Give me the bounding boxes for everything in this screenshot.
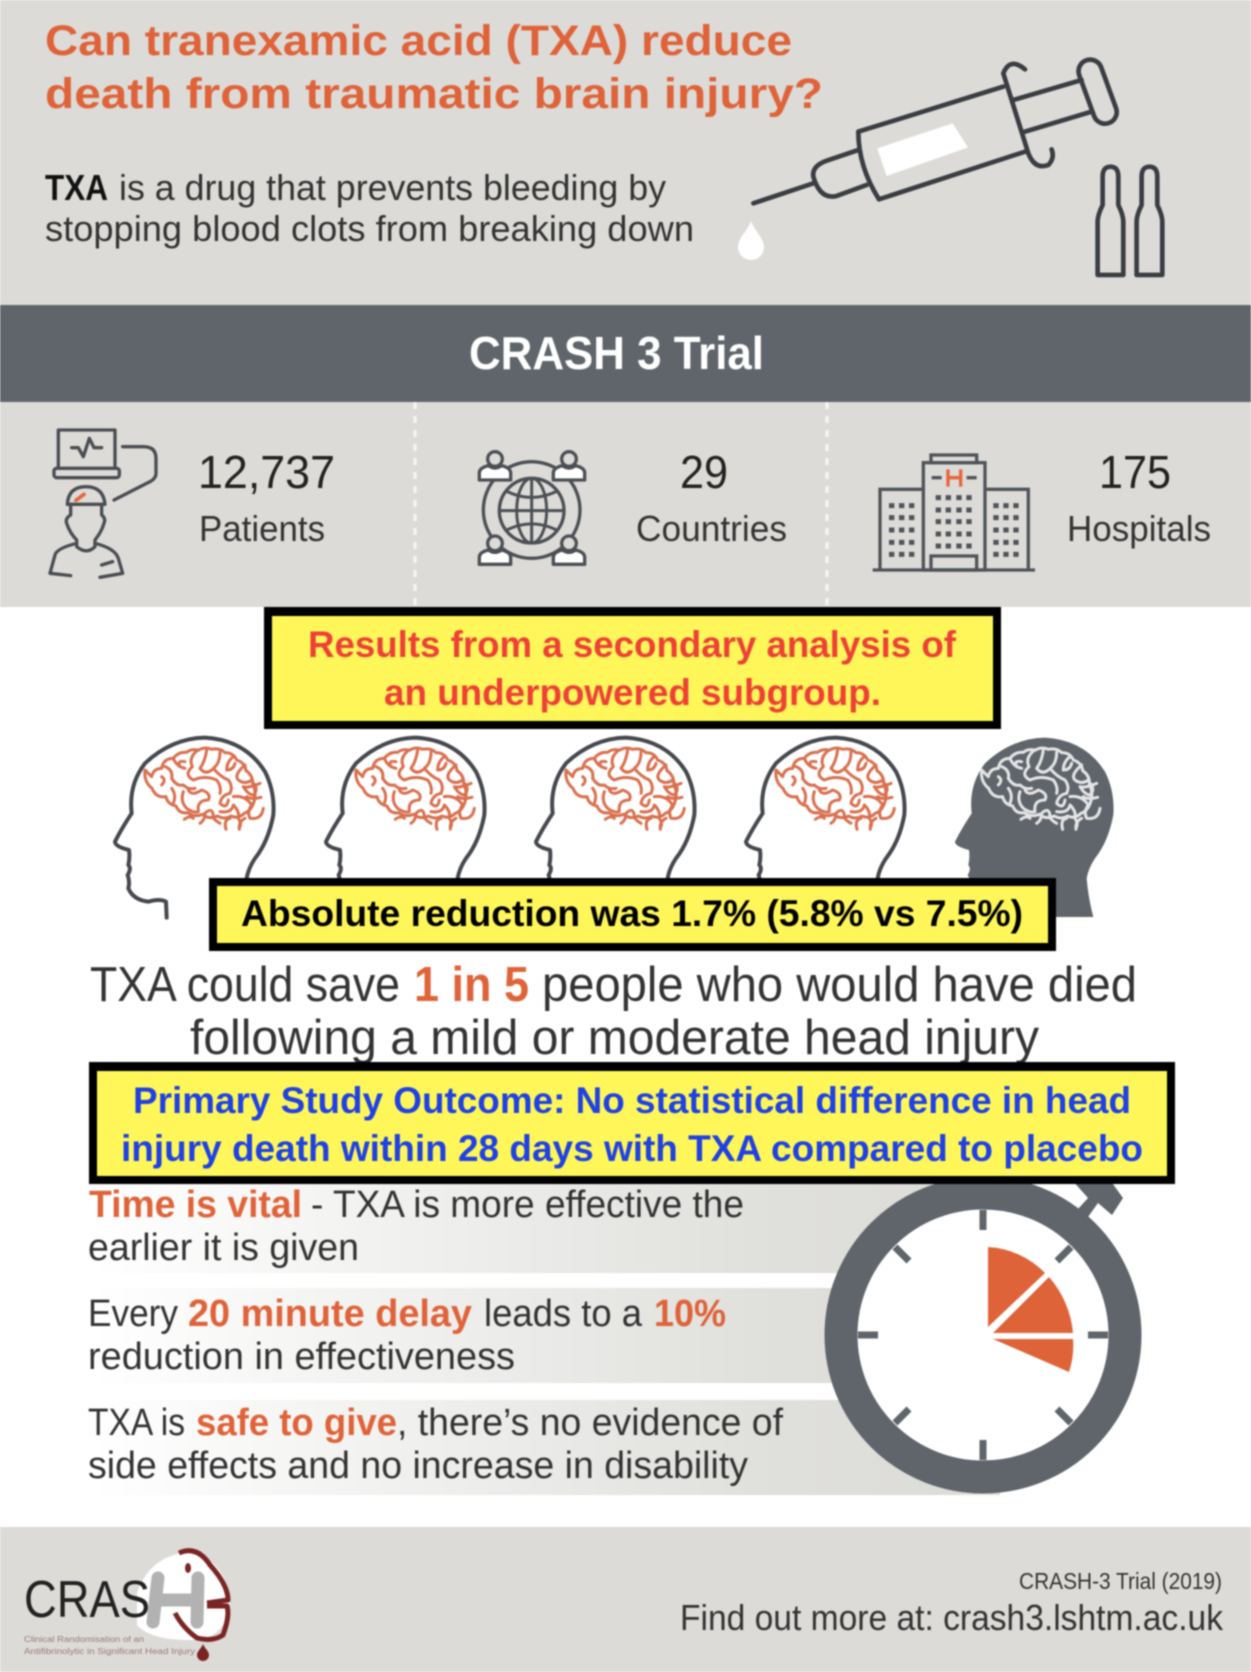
text block: safe to give: TXA is	[88, 1402, 185, 1444]
text block: 20 minute delay: 20 minute delay	[188, 1293, 472, 1335]
logo: CRASH: Antifibrinolytic in Significant Head Injury	[24, 1647, 195, 1656]
text block: safe to give: side effects and no increase in disability	[88, 1445, 748, 1487]
banner: CRASH 3 Trial	[0, 305, 1251, 402]
stat: countries: 29	[680, 446, 728, 498]
text block: 1 in 5 statement	[90, 958, 1137, 1065]
text block: TXA definition	[45, 167, 694, 249]
callout: primary study outcome	[89, 1062, 1175, 1184]
text block: safe to give	[88, 1402, 783, 1487]
text block: time is vital	[88, 1184, 744, 1269]
stat: hospitals	[1067, 446, 1211, 549]
icon: hospital	[873, 455, 1035, 570]
text block: time is vital: earlier it is given	[88, 1227, 359, 1269]
text block: time is vital: - TXA is more effective the	[311, 1184, 744, 1226]
title	[45, 17, 823, 118]
title: death from traumatic brain injury?	[45, 70, 823, 118]
text block: TXA definition: is a drug that prevents bleeding by	[119, 167, 666, 208]
title: Can tranexamic acid (TXA) reduce	[45, 17, 792, 65]
callout: absolute reduction	[209, 878, 1056, 951]
text block: citation and link: Find out more at: crash3.lshtm.ac.uk	[680, 1597, 1224, 1638]
callout: primary study outcome: Primary Study Outcome: No statistical difference in head	[133, 1080, 1131, 1121]
banner: CRASH 3 Trial: CRASH 3 Trial	[469, 327, 764, 379]
text block: time is vital: Time is vital	[89, 1184, 302, 1226]
icon: vials	[1098, 167, 1162, 275]
callout: secondary analysis: an underpowered subgroup.	[384, 672, 881, 713]
logo: CRASH	[24, 1551, 230, 1661]
stat: patients: 12,737	[198, 446, 335, 498]
panel: header	[0, 0, 1251, 305]
text block: safe to give: , there’s no evidence of	[397, 1402, 783, 1444]
icon: globe with people	[479, 452, 585, 564]
stat: countries: Countries	[636, 508, 787, 549]
text block: 20 minute delay: Every	[88, 1293, 178, 1335]
stat: patients	[198, 446, 335, 549]
stat: countries	[636, 446, 787, 549]
text block: TXA definition: TXA	[45, 167, 108, 208]
icon: patient with monitor	[50, 430, 156, 577]
icon: head 1 with orange brain	[115, 738, 274, 918]
text block: citation and link: CRASH-3 Trial (2019)	[1019, 1568, 1222, 1594]
text block: citation and link	[680, 1568, 1224, 1638]
panel: key messages gradient rows	[85, 1184, 1000, 1495]
callout: secondary analysis	[264, 607, 1001, 729]
panel: trial statistics	[0, 402, 1251, 607]
text block: safe to give: safe to give	[196, 1402, 397, 1444]
stat: patients: Patients	[199, 508, 325, 549]
logo: CRASH: Clinical Randomisation of an	[24, 1635, 144, 1644]
text block: 20 minute delay: 10%	[654, 1293, 726, 1335]
icon: stopwatch	[841, 1180, 1125, 1477]
text block: TXA definition: stopping blood clots from breaking down	[45, 208, 694, 249]
icon: head 2 with orange brain	[326, 738, 485, 918]
text block: 1 in 5 statement: TXA could save	[90, 958, 400, 1012]
text block: 20 minute delay: leads to a	[484, 1293, 643, 1335]
text block: 1 in 5 statement: people who would have died	[542, 958, 1137, 1012]
icon: head 3 with orange brain	[536, 738, 695, 918]
callout: secondary analysis: Results from a secondary analysis of	[308, 624, 957, 665]
text block: 20 minute delay	[88, 1293, 726, 1378]
stat: hospitals: 175	[1099, 446, 1171, 498]
callout: absolute reduction: Absolute reduction was 1.7% (5.8% vs 7.5%)	[241, 893, 1023, 934]
icon: syringe	[753, 56, 1120, 203]
text block: 1 in 5 statement: following a mild or moderate head injury	[190, 1011, 1039, 1065]
text block: 20 minute delay: reduction in effectiveness	[88, 1336, 515, 1378]
icon: head 4 with orange brain	[746, 738, 905, 918]
logo: CRASH: CRAS	[24, 1571, 150, 1629]
text block: 1 in 5 statement: 1 in 5	[414, 958, 529, 1012]
panel: footer	[0, 1527, 1251, 1672]
callout: primary study outcome: injury death within 28 days with TXA compared to placebo	[121, 1128, 1143, 1169]
icon: dark filled head with white brain	[955, 738, 1114, 917]
icon: drop	[738, 221, 764, 260]
stat: hospitals: Hospitals	[1067, 508, 1211, 549]
